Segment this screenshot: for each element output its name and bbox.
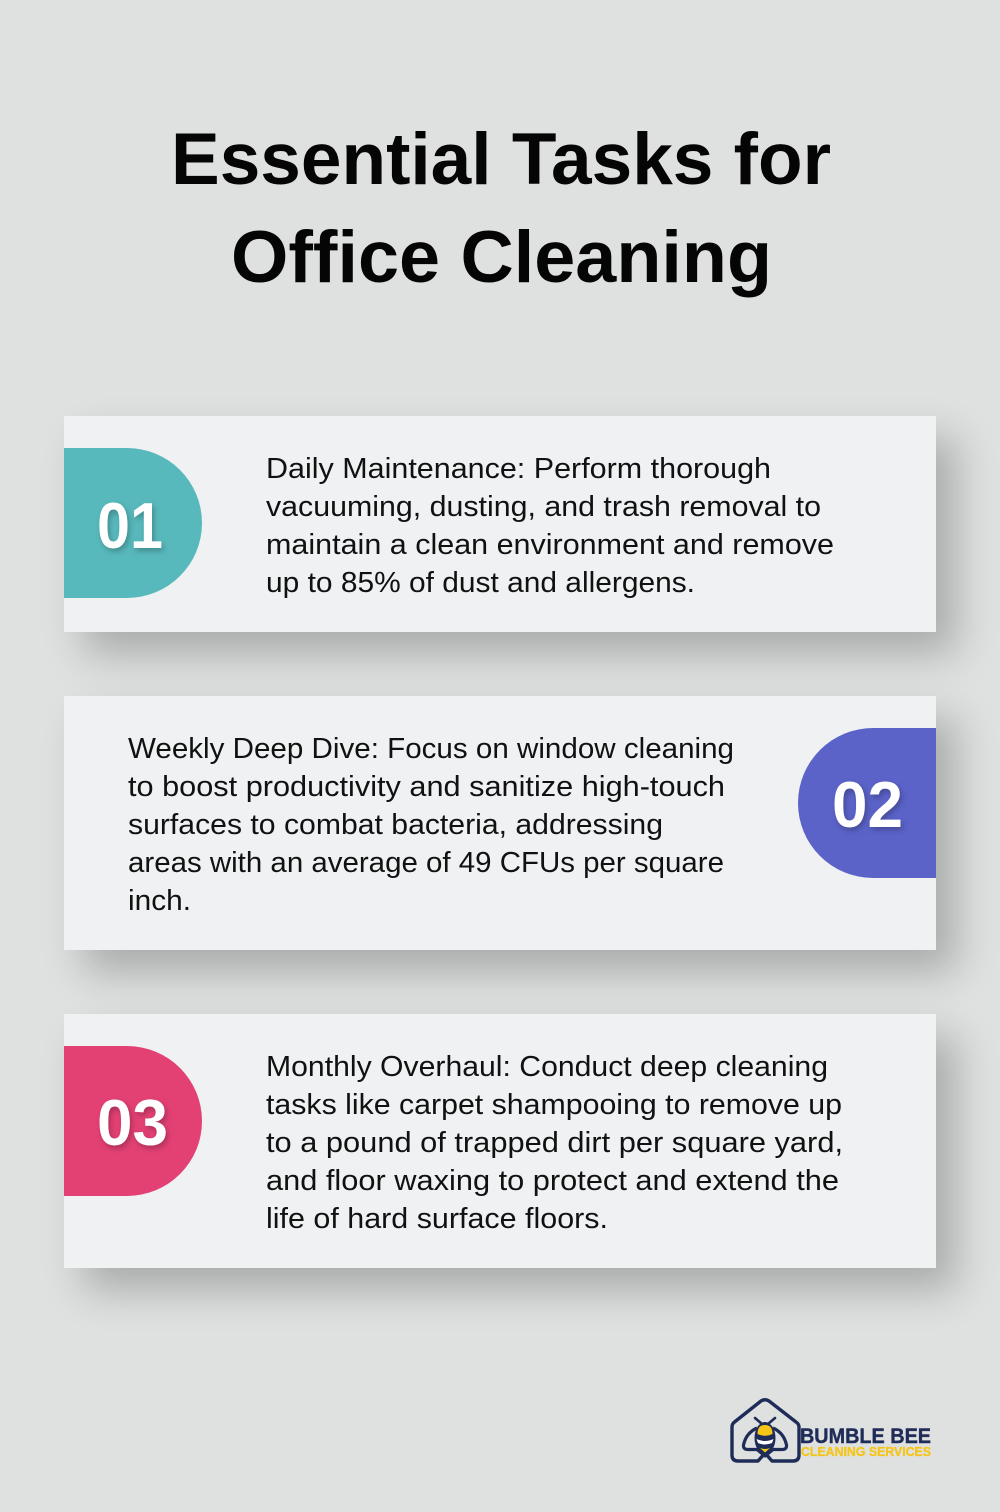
badge: 03: 03 <box>97 1086 168 1159</box>
wordmark: BUMBLE BEE <box>800 1425 931 1448</box>
text: weekly deep dive description: areas with an average of 49 CFUs per square <box>128 847 724 879</box>
text: daily maintenance description: up to 85% of dust and allergens. <box>266 567 695 599</box>
text: daily maintenance description: Daily Maintenance: Perform thorough <box>266 453 771 485</box>
panel: monthly overhaul <box>64 1014 936 1268</box>
text: weekly deep dive description: to boost productivity and sanitize high-touch <box>128 771 725 803</box>
badge: 02 <box>798 728 936 878</box>
text: weekly deep dive description: inch. <box>128 885 191 917</box>
text: weekly deep dive description: surfaces to combat bacteria, addressing <box>128 809 663 841</box>
text: daily maintenance description <box>266 453 834 599</box>
text: daily maintenance description: vacuuming, dusting, and trash removal to <box>266 491 821 523</box>
panel: daily maintenance <box>64 416 936 632</box>
text: monthly overhaul description: tasks like carpet shampooing to remove up <box>266 1089 842 1121</box>
text: monthly overhaul description: Monthly Overhaul: Conduct deep cleaning <box>266 1051 828 1083</box>
text: daily maintenance description: maintain a clean environment and remove <box>266 529 834 561</box>
panel: weekly deep dive <box>64 696 936 950</box>
wordmark: CLEANING SERVICES <box>801 1444 931 1459</box>
title: Essential Tasks for <box>171 119 831 200</box>
text: monthly overhaul description: and floor waxing to protect and extend the <box>266 1165 839 1197</box>
badge: 01: 01 <box>97 489 163 562</box>
icon: house with bee <box>732 1400 799 1461</box>
badge: 02: 02 <box>832 768 903 841</box>
text: weekly deep dive description: Weekly Deep Dive: Focus on window cleaning <box>128 733 734 765</box>
title <box>171 119 831 298</box>
text: weekly deep dive description <box>128 733 734 917</box>
title: Office Cleaning <box>231 217 772 298</box>
wordmark <box>800 1425 931 1459</box>
badge: 03 <box>64 1046 202 1196</box>
badge: 01 <box>64 448 202 598</box>
text: monthly overhaul description: to a pound of trapped dirt per square yard, <box>266 1127 843 1159</box>
text: monthly overhaul description: life of hard surface floors. <box>266 1203 608 1235</box>
logo: Bumble Bee Cleaning Services <box>730 1398 931 1463</box>
text: monthly overhaul description <box>266 1051 843 1235</box>
